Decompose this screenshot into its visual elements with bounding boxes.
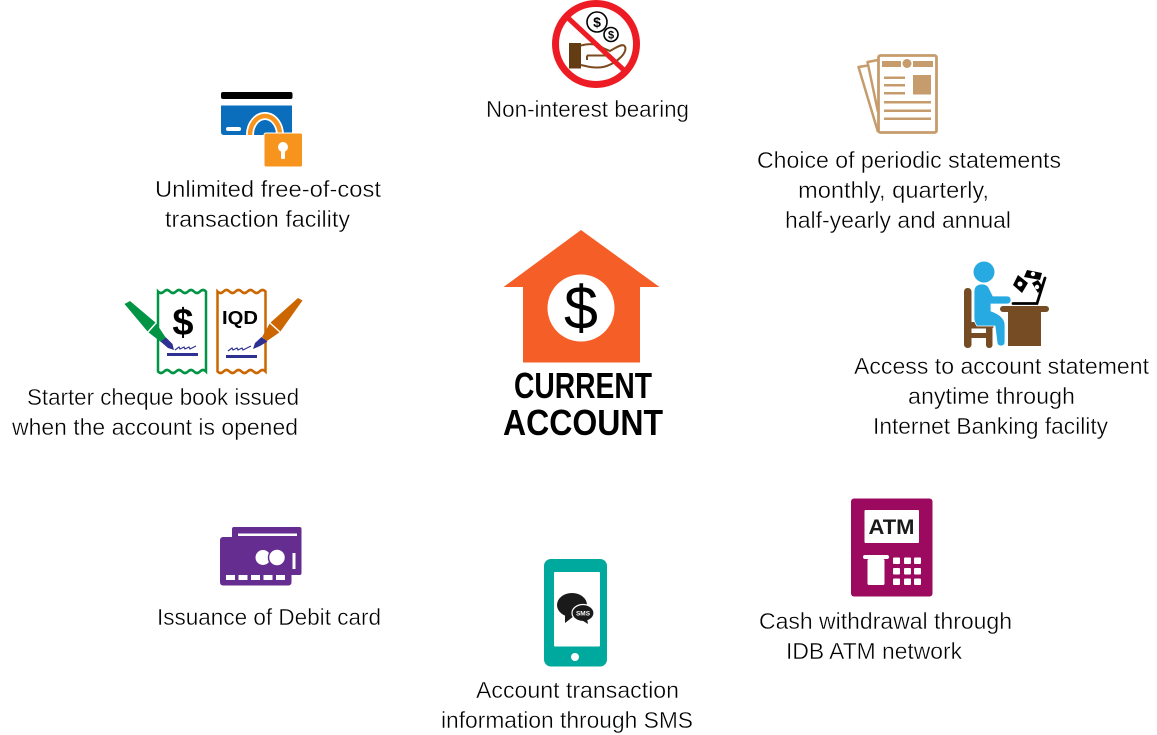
text: debit card: Issuance of Debit card bbox=[157, 604, 381, 630]
icon: cheques and pens: $ bbox=[172, 302, 194, 344]
text: internet banking: Access to account statement bbox=[854, 353, 1149, 379]
text: cheque book: Starter cheque book issued bbox=[27, 384, 299, 410]
icon: no interest hand and coins: $ bbox=[593, 14, 601, 30]
text: internet banking: anytime through bbox=[908, 383, 1075, 409]
icon: house with dollar: $ bbox=[564, 274, 598, 342]
panel: sms bbox=[441, 559, 693, 733]
icon: atm machine: ATM bbox=[868, 516, 914, 539]
panel: centre current account bbox=[503, 230, 663, 443]
text: atm: IDB ATM network bbox=[786, 638, 962, 664]
icon: person at desk with laptop bbox=[964, 262, 1049, 348]
text: internet banking: Internet Banking facility bbox=[873, 413, 1108, 439]
text: atm: Cash withdrawal through bbox=[759, 608, 1012, 634]
panel: non-interest bearing bbox=[486, 4, 689, 122]
icon: no interest hand and coins: $ bbox=[608, 30, 614, 42]
panel: cheque book bbox=[11, 290, 302, 440]
icon: cheques and pens: IQD bbox=[222, 308, 258, 328]
text: periodic statements: monthly, quarterly, bbox=[798, 177, 989, 203]
icon: card with padlock bbox=[221, 92, 302, 167]
panel: internet banking bbox=[854, 262, 1149, 439]
text: cheque book bbox=[11, 384, 299, 440]
icon: debit cards bbox=[220, 527, 302, 586]
heading: current account: CURRENT bbox=[514, 365, 652, 406]
heading: current account: ACCOUNT bbox=[503, 402, 663, 443]
icon: atm machine bbox=[851, 498, 932, 596]
panel: atm bbox=[759, 498, 1012, 664]
text: free transactions: Unlimited free-of-cost bbox=[155, 176, 381, 202]
text: internet banking bbox=[854, 353, 1149, 439]
icon: cheques and pens bbox=[124, 290, 302, 373]
icon: phone with sms bubbles: SMS bbox=[576, 610, 591, 618]
icon: no interest hand and coins bbox=[556, 4, 636, 84]
text: sms bbox=[441, 677, 693, 733]
text: periodic statements: Choice of periodic statements bbox=[757, 147, 1061, 173]
text: atm bbox=[759, 608, 1012, 664]
text: sms: Account transaction bbox=[476, 677, 679, 703]
panel: debit card bbox=[157, 527, 381, 630]
text: sms: information through SMS bbox=[441, 707, 693, 733]
panel: free transactions bbox=[155, 92, 381, 232]
icon: stacked statement papers bbox=[858, 56, 936, 132]
text: free transactions: transaction facility bbox=[165, 206, 350, 232]
text: cheque book: when the account is opened bbox=[11, 414, 298, 440]
text: periodic statements bbox=[757, 147, 1061, 233]
icon: house with dollar bbox=[504, 230, 660, 362]
text: free transactions bbox=[155, 176, 381, 232]
text: non-interest bearing: Non-interest bearing bbox=[486, 96, 689, 122]
panel: periodic statements bbox=[757, 56, 1061, 233]
icon: phone with sms bubbles bbox=[544, 559, 607, 666]
text: periodic statements: half-yearly and annual bbox=[785, 207, 1011, 233]
heading: current account bbox=[503, 365, 663, 443]
